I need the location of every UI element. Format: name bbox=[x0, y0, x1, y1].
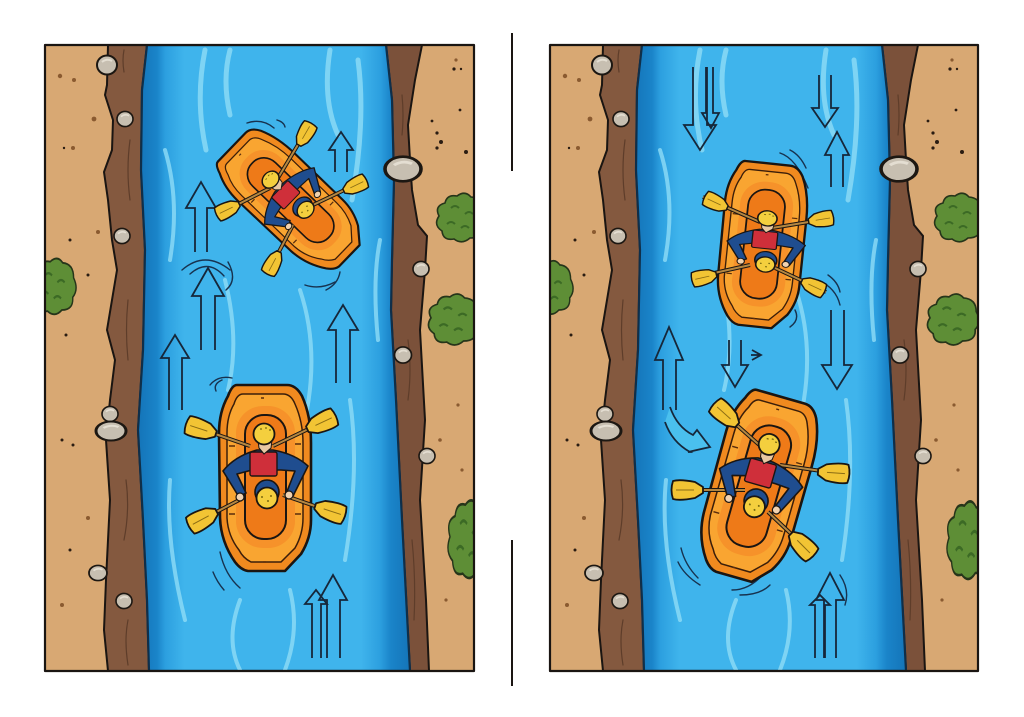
swirl lines bbox=[678, 150, 847, 605]
raft: bottom left boat bbox=[183, 385, 348, 571]
rocks bbox=[89, 56, 435, 609]
panel: left river scene bbox=[32, 45, 490, 671]
flow arrows bbox=[161, 132, 358, 658]
water streaks bbox=[165, 50, 380, 670]
water bbox=[633, 45, 906, 671]
divider bbox=[511, 33, 513, 686]
bushes bbox=[529, 193, 989, 579]
water streaks bbox=[660, 50, 876, 670]
left bank bbox=[599, 45, 644, 671]
sand speckles bbox=[58, 58, 468, 607]
panel border left bbox=[45, 45, 474, 671]
bushes bbox=[32, 193, 490, 578]
left bank bbox=[104, 45, 149, 671]
swirl lines bbox=[182, 120, 340, 590]
right bank bbox=[386, 45, 429, 671]
raft: bottom right boat bbox=[672, 385, 850, 589]
flow arrows bbox=[655, 67, 852, 658]
right bank bbox=[882, 45, 925, 671]
rocks bbox=[585, 56, 931, 609]
panel: right river scene bbox=[529, 45, 989, 671]
sand speckles bbox=[563, 58, 964, 607]
water bbox=[138, 45, 410, 671]
panel border right bbox=[550, 45, 978, 671]
raft: top left boat bbox=[208, 119, 374, 283]
raft: top right boat bbox=[690, 159, 835, 331]
